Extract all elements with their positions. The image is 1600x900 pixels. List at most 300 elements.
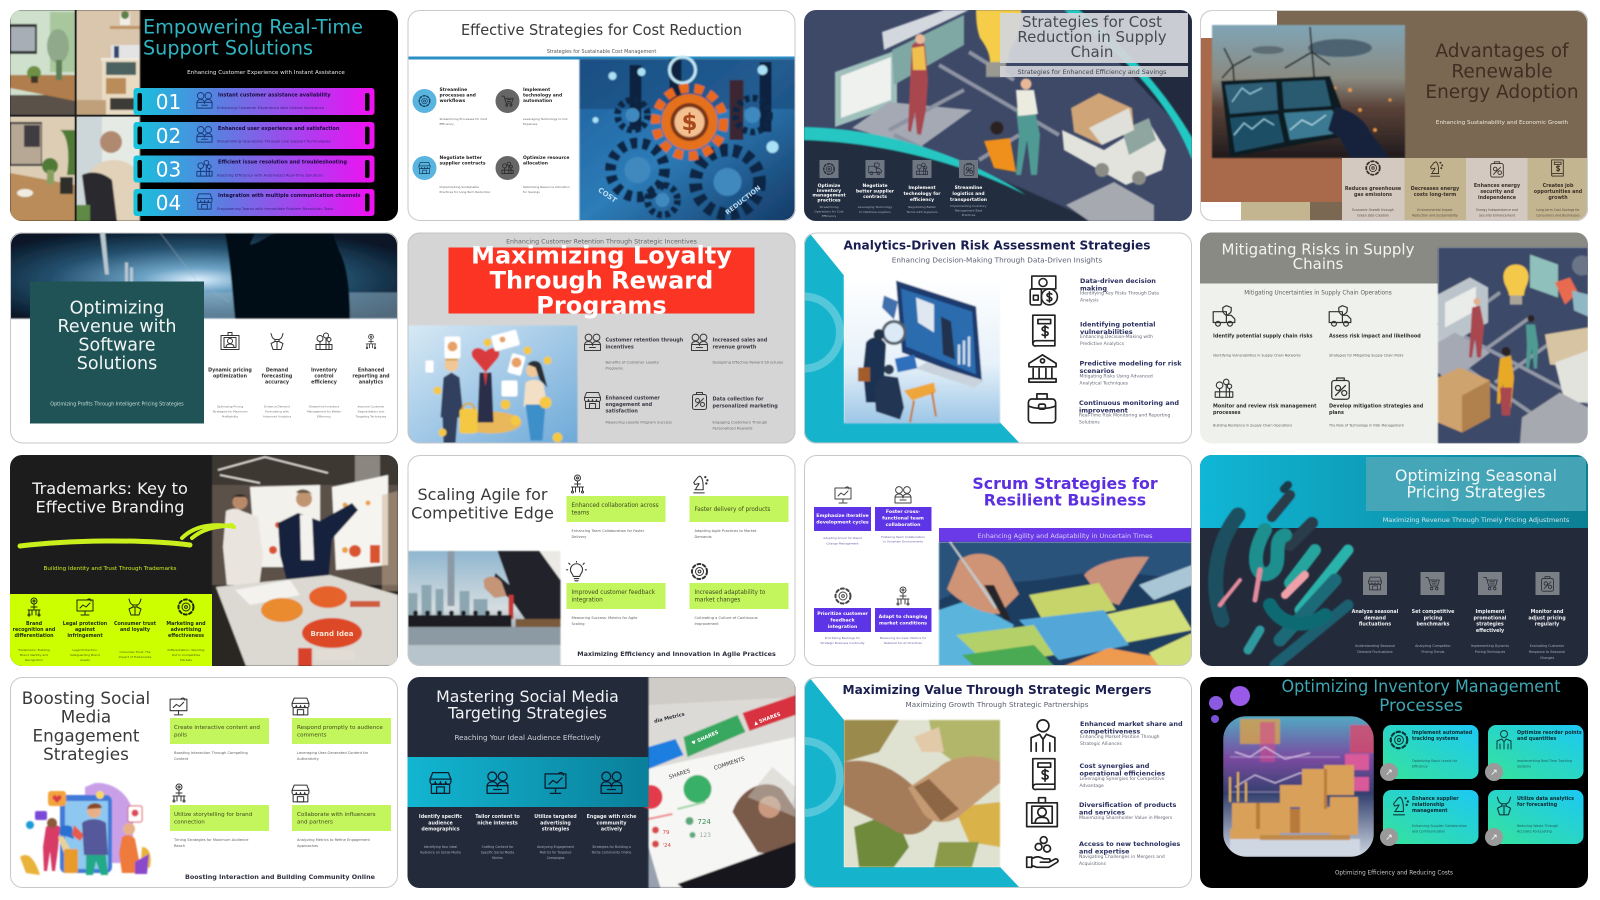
four green callouts: Scaling	[572, 622, 585, 626]
footer tagline: Maximizing Efficiency and Innovation in Agile Practices	[577, 650, 776, 658]
four targeting columns: advertising	[540, 820, 571, 826]
four gradient strategy cards: Enhancing Supplier Collaboration	[1412, 824, 1467, 828]
list of four strategies: Mitigating Risks Using Advanced	[1080, 374, 1153, 380]
four benefit columns: opportunities and	[1534, 189, 1583, 195]
teal icon band	[408, 757, 648, 807]
green feature band: effectiveness	[168, 633, 204, 639]
subtitle: Optimizing Profits Through Intelligent Pricing Strategies	[50, 402, 184, 408]
title: Mastering Social Media	[436, 687, 619, 706]
panel: Maximizing Loyalty Through Reward Programs	[408, 232, 796, 444]
four feature columns: optimization	[213, 374, 248, 380]
four pricing columns: Analyzing Competitor	[1415, 644, 1451, 648]
panel: Trademarks: Key to Effective Branding: Brand Idea	[310, 630, 354, 638]
four icon columns: Leveraging Technology	[858, 205, 892, 209]
four icon columns: Implement	[908, 186, 936, 191]
four targeting columns: strategies	[542, 827, 569, 833]
four green callouts: Content	[174, 757, 189, 761]
risk items: Building Resilience in Supply Chain Operations	[1213, 424, 1292, 428]
subtitle: Enhancing Customer Retention Through Strategic Incentives	[506, 238, 697, 246]
four gradient strategy cards: Enhance supplier	[1412, 797, 1459, 802]
panel: Optimizing Inventory Management Processes: Processes	[1379, 696, 1463, 716]
benefit items: Engaging Customers Through	[712, 420, 767, 424]
four green callouts: Leveraging User-Generated Content for	[297, 751, 368, 755]
four purple strategy boxes: Resilient Scrum Practices	[884, 641, 922, 645]
panel: Optimizing Revenue with Software Solutions: Optimizing	[70, 298, 164, 318]
list of four numbered bars: Enhanced user experience and satisfaction	[218, 126, 340, 132]
title box	[1000, 13, 1188, 63]
risk items: Strategies for Mitigating Supply Chain Risks	[1329, 354, 1404, 358]
list of four strategies: Identifying potential	[1080, 320, 1156, 328]
four targeting columns: Audience on Social Media	[420, 850, 461, 854]
list of four strategies: Predictive modeling for risk	[1080, 360, 1182, 368]
four pricing columns: Set competitive	[1412, 610, 1454, 615]
risk items: Identify potential supply chain risks	[1213, 334, 1313, 340]
four green callouts: Collaborate with influencers	[297, 812, 376, 818]
list of four strategies: Data-driven decision	[1080, 277, 1156, 285]
benefit items: Enhanced customer	[606, 396, 660, 402]
four pricing columns: pricing	[1424, 615, 1443, 621]
panel: Mastering Social Media Targeting Strategies: SHARES	[668, 768, 692, 781]
four icon columns: Efficiency	[822, 214, 836, 218]
four feature columns: Inventory	[311, 368, 337, 374]
panel: Mastering Social Media Targeting Strategies: '24	[662, 843, 672, 849]
four green callouts: Enhancing Team Collaboration for Faster	[572, 529, 644, 533]
four targeting columns: Crafting Content for	[482, 845, 513, 849]
list of four benefits: Acquisitions	[1079, 861, 1107, 867]
decorative purple circles	[1209, 686, 1250, 723]
four pricing columns: Implement	[1475, 610, 1505, 615]
four feature columns: reporting and	[352, 374, 390, 380]
four green callouts: Enhanced collaboration across	[572, 503, 659, 509]
title: Maximizing Value Through Strategic Mergers	[842, 683, 1152, 697]
four gradient strategy cards: and quantities	[1517, 736, 1556, 742]
four pricing columns: Implementing Dynamic	[1471, 644, 1509, 648]
panel: Strategies for Cost Reduction in Supply Chain: Strategies for Cost	[1022, 13, 1162, 31]
panel: Optimizing Seasonal Pricing Strategies	[1200, 455, 1588, 666]
four icon columns	[812, 160, 987, 218]
strategy items	[412, 87, 570, 194]
panel: Maximizing Loyalty Through Reward Programs: Maximizing Loyalty	[471, 242, 732, 270]
four gradient strategy cards: Efficiency	[1412, 764, 1428, 768]
four icon columns: Negotiate	[862, 184, 888, 189]
strategy items: processes and	[440, 92, 476, 98]
risk items: Assess risk impact and likelihood	[1329, 334, 1421, 340]
title: Scrum Strategies for	[972, 474, 1158, 493]
benefit items: Customer retention through	[606, 338, 683, 344]
panel: Effective Strategies for Cost Reduction: COST	[596, 186, 618, 205]
list of four benefits: Access to new technologies	[1079, 840, 1180, 848]
title: Boosting Social	[22, 688, 150, 708]
green feature band: differentiation	[14, 633, 54, 639]
four gradient strategy cards: management	[1412, 808, 1448, 814]
green feature band: Impact of Trademarks	[119, 655, 152, 659]
four purple strategy boxes: development cycles	[816, 520, 869, 526]
benefit items: incentives	[606, 344, 634, 350]
panel: Mastering Social Media Targeting Strategies: 123	[700, 832, 711, 839]
list of four numbered bars: Empowering Teams with Immediate Problem Resolution Tools	[217, 206, 333, 211]
four benefit columns: gas emissions	[1354, 192, 1392, 198]
four feature columns: Streamline Inventory	[309, 404, 339, 408]
subtitle: Maximizing Growth Through Strategic Partnerships	[906, 700, 1089, 709]
four targeting columns: community	[596, 820, 627, 826]
strategy items: Optimizing Resource Allocation	[523, 185, 570, 189]
list of four numbered bars: Efficient issue resolution and troubleshooting	[218, 160, 347, 166]
four targeting columns: Identifying Your Ideal	[424, 845, 457, 849]
four gradient strategy cards: Optimizing Stock Levels for	[1412, 759, 1457, 763]
four green callouts: Authenticity	[297, 757, 320, 761]
green feature band: Legal Protection:	[72, 648, 98, 652]
four targeting columns: Niches	[492, 856, 503, 860]
four icon columns: efficiency	[910, 197, 934, 203]
abstract slanted graphic	[1216, 485, 1348, 665]
four green callouts: Reach	[174, 844, 185, 848]
panel: Optimizing Seasonal Pricing Strategies: Optimizing Seasonal	[1395, 466, 1557, 485]
four benefit columns: independence	[1478, 195, 1517, 201]
four benefit columns: Security Enhancement	[1479, 214, 1516, 218]
panel: Empowering Real-Time Support Solutions: Support Solutions	[143, 36, 313, 60]
list of four benefits: Enhancing Market Position Through	[1080, 735, 1160, 740]
gears image	[580, 57, 796, 221]
list of four strategies: Analysis	[1080, 298, 1099, 304]
panel: Strategies for Cost Reduction in Supply Chain: Chain	[1071, 43, 1113, 61]
green feature band: Out in Competitive	[172, 653, 200, 657]
strategy items: technology and	[523, 92, 562, 98]
four benefit columns: Enhances energy	[1474, 184, 1520, 189]
four gradient strategy cards: Utilize data analytics	[1517, 797, 1574, 802]
list of four benefits: and services	[1079, 808, 1125, 816]
four targeting columns: audience	[428, 820, 453, 826]
list of four strategies: vulnerabilities	[1080, 328, 1133, 336]
four gradient strategy cards: Systems	[1517, 764, 1531, 768]
panel: Strategies for Cost Reduction in Supply Chain: Reduction in Supply	[1017, 28, 1167, 46]
four icon columns: Negotiating Better	[908, 205, 936, 209]
benefit items: revenue growth	[712, 344, 757, 350]
strategy items: Implementing Sustainable	[440, 185, 479, 189]
benefit items: personalized marketing	[712, 404, 778, 410]
panel: Trademarks: Key to Effective Branding	[10, 455, 398, 666]
subtitle: Enhancing Sustainability and Economic Growth	[1436, 120, 1569, 126]
panel: Maximizing Value Through Strategic Mergers	[768, 677, 1192, 888]
four feature columns: forecasting	[262, 374, 293, 380]
benefit items: Programs	[606, 366, 623, 370]
handshake over map image	[844, 720, 1000, 867]
four pricing columns: Understanding Seasonal	[1355, 644, 1395, 648]
four purple strategy boxes: Emphasize iterative	[816, 514, 869, 519]
title: Mitigating Risks in Supply	[1222, 240, 1414, 258]
title: Scaling Agile for	[418, 485, 547, 504]
four green callouts: Improved customer feedback	[572, 590, 655, 596]
purple subtitle band	[939, 528, 1192, 542]
four icon columns: practices	[817, 197, 841, 203]
four benefit columns: Environmental Impact	[1417, 208, 1453, 212]
green feature band: Trademarks: Building	[18, 648, 50, 652]
list of four strategies: Analytical Techniques	[1080, 380, 1129, 386]
four green callouts: Demands	[694, 535, 712, 539]
four targeting columns: Strategies for Building a	[592, 845, 631, 849]
four benefit columns: Long-term Cost Savings for	[1536, 208, 1580, 212]
panel: Mastering Social Media Targeting Strategies: COMMENTS	[713, 756, 746, 772]
four purple strategy boxes: collaboration	[886, 522, 920, 528]
green feature band: recognition and	[13, 627, 56, 633]
four pricing columns: Pricing Trends	[1422, 650, 1445, 654]
list of four strategies: scenarios	[1080, 367, 1115, 375]
list of four benefits: Navigating Challenges in Mergers and	[1079, 855, 1165, 860]
risk items: processes	[1213, 410, 1241, 416]
four purple strategy boxes: Prioritizing Backlogs for	[825, 636, 860, 640]
strategy items: Negotiate better	[440, 156, 482, 161]
green feature band: Legal protection	[63, 622, 107, 627]
strategy items: Implement	[523, 88, 550, 93]
four icon columns: Implementing Inventory	[950, 204, 987, 208]
list of four numbered bars	[134, 88, 374, 216]
list of four strategies	[1028, 276, 1182, 426]
four gradient strategy cards: Implement automated	[1412, 731, 1472, 736]
footer subtitle: Optimizing Efficiency and Reducing Costs	[1335, 870, 1453, 876]
subtitle: Reaching Your Ideal Audience Effectively	[454, 733, 601, 742]
list of four strategies: Real-Time Risk Monitoring and Reporting	[1079, 414, 1170, 418]
panel: Optimizing Inventory Management Processes	[1200, 677, 1588, 888]
four targeting columns: actively	[601, 827, 623, 833]
four purple strategy boxes: Change Management	[826, 542, 859, 546]
subtitle: Building Identity and Trust Through Trademarks	[44, 566, 177, 572]
four benefit columns: Consumers and Businesses	[1536, 214, 1580, 218]
subtitle: Enhancing Decision-Making Through Data-Driven Insights	[892, 256, 1102, 264]
four green callouts: Approaches	[297, 844, 318, 848]
four green callouts: Increased adaptability to	[694, 590, 765, 596]
four purple strategy boxes: Adapt to changing	[879, 615, 927, 620]
four icon columns: Management Best	[955, 208, 983, 212]
green feature band: and loyalty	[120, 627, 151, 633]
social media illustration	[20, 783, 151, 875]
four feature columns: Enhance Demand	[264, 404, 290, 408]
four icon columns: Operations for Cost	[814, 210, 844, 214]
green feature band: Markets	[180, 658, 192, 662]
four feature columns: Advanced Analytics	[263, 414, 292, 418]
title box	[1366, 457, 1586, 511]
strategy items: for Savings	[523, 190, 540, 194]
four icon columns: Optimize	[818, 184, 840, 189]
home office photo collage	[10, 10, 140, 221]
panel: Maximizing Loyalty Through Reward Programs: Programs	[536, 292, 667, 320]
panel: Effective Strategies for Cost Reduction: REDUCTION	[724, 184, 762, 217]
four green callouts	[170, 698, 391, 848]
four feature columns: accuracy	[265, 380, 290, 386]
four targeting columns: Identify specific	[419, 815, 462, 820]
title: Targeting Strategies	[447, 704, 607, 722]
four feature columns: efficiency	[311, 380, 338, 386]
panel: Mastering Social Media Targeting Strategies: dia Metrics	[654, 712, 685, 725]
benefit items: Measuring Loyalty Program Success	[606, 420, 672, 424]
four benefit columns: Reduction and Sustainability	[1412, 214, 1458, 218]
four purple strategy boxes: market conditions	[879, 620, 927, 626]
four pricing columns: demand	[1364, 615, 1386, 621]
four gradient strategy cards: Reducing Waste Through	[1517, 824, 1558, 828]
four gradient strategy cards: relationship	[1412, 802, 1445, 808]
green feature band: Assets	[80, 658, 90, 662]
four targeting columns: niche interests	[477, 820, 518, 826]
four purple strategy boxes: Adopting Scrum for Rapid	[823, 536, 862, 540]
list of four benefits: Cost synergies and	[1080, 762, 1149, 770]
title box	[30, 282, 204, 424]
list of four strategies: Continuous monitoring and	[1079, 399, 1179, 407]
risk items: plans	[1329, 410, 1344, 416]
green feature band: advertising	[171, 627, 202, 633]
list of four strategies: Enhancing Decision-Making with	[1080, 335, 1153, 340]
title: Effective Strategies for Cost Reduction	[461, 21, 742, 39]
four feature columns: Efficiency	[317, 414, 331, 418]
green feature band: Differentiation: Standing	[168, 648, 204, 652]
title: Strategies	[43, 744, 129, 764]
risk items: The Role of Technology in Risk Management	[1328, 424, 1404, 428]
title: Media	[61, 707, 111, 727]
four green callouts: Create interactive content and	[174, 725, 260, 731]
warehouse data photo	[1223, 716, 1374, 857]
four benefit columns: Green Jobs Creation	[1357, 214, 1389, 218]
list of four strategies: making	[1080, 284, 1107, 292]
list of four benefits	[1027, 720, 1183, 867]
benefit items: Benefits of Customer Loyalty	[606, 360, 659, 364]
strategy items: allocation	[523, 160, 548, 166]
four green callouts: Utilize storytelling for brand	[174, 812, 252, 818]
strategy items: Expenses	[523, 122, 538, 126]
four benefit columns: security and	[1480, 189, 1514, 195]
panel: Empowering Real-Time Support Solutions	[10, 10, 398, 221]
panel: Effective Strategies for Cost Reduction: $	[681, 110, 698, 136]
list of four benefits: Leveraging Synergies for Competitive	[1080, 777, 1165, 782]
panel: Optimizing Revenue with Software Solutions	[10, 232, 398, 444]
four purple strategy boxes: in Uncertain Environments	[883, 540, 923, 544]
risk items	[1213, 306, 1424, 428]
four gradient strategy cards: tracking systems	[1412, 736, 1458, 742]
panel: Mastering Social Media Targeting Strategies: ♥ SHARES	[691, 729, 720, 747]
four icon columns: Practices	[962, 213, 976, 217]
four gradient strategy cards: Accurate Forecasting	[1517, 830, 1552, 834]
subtitle box	[1000, 66, 1188, 77]
four feature columns: Profitability	[222, 414, 238, 418]
four pricing columns: fluctuations	[1359, 622, 1391, 628]
four green callouts: Respond promptly to audience	[297, 725, 383, 731]
four green callouts: polls	[174, 732, 187, 738]
four green callouts: Cultivating a Culture of Continuous	[694, 616, 758, 620]
strategy items: Streamline	[440, 88, 467, 93]
risk items: Monitor and review risk management	[1213, 404, 1316, 410]
list of four benefits: and expertise	[1079, 848, 1130, 856]
strategy items: Optimize resource	[523, 156, 569, 161]
four green callouts: Adapting Agile Practices to Market	[694, 529, 756, 533]
subtitle: Maximizing Revenue Through Timely Pricing Adjustments	[1383, 516, 1570, 524]
four green callouts	[566, 475, 788, 626]
list of four numbered bars: 04	[156, 191, 181, 215]
four pricing columns: Pricing Techniques	[1475, 650, 1506, 654]
title: Effective Branding	[35, 498, 185, 516]
four purple strategy boxes: Measuring Success: Metrics for	[880, 636, 926, 640]
panel: Mitigating Risks in Supply Chains	[1200, 232, 1592, 444]
green feature band: Marketing and	[166, 622, 206, 627]
four gradient strategy cards: ↗	[1385, 833, 1393, 843]
list of four numbered bars: Streamlining Operations Through Live Support Technologies	[217, 138, 331, 144]
title: Trademarks: Key to	[32, 479, 188, 498]
four icon columns: inventory	[817, 188, 841, 194]
four benefit columns: Creates job	[1543, 184, 1573, 189]
four benefit columns: growth	[1548, 195, 1568, 201]
four feature columns: analytics	[359, 380, 383, 386]
four pricing columns: regularly	[1535, 622, 1560, 628]
list of four numbered bars: Instant customer assistance availability	[218, 92, 331, 98]
panel: Optimizing Seasonal Pricing Strategies: Pricing Strategies	[1407, 482, 1545, 502]
four targeting columns: Engage with niche	[587, 815, 636, 820]
risk items: Identifying Vulnerabilities in Supply Chain Networks	[1213, 354, 1301, 358]
four pricing columns: Demand Fluctuations	[1357, 650, 1393, 654]
four feature columns: Strategies for Maximum	[213, 410, 248, 414]
four pricing columns: benchmarks	[1416, 622, 1450, 628]
list of four benefits: Enhanced market share and	[1080, 720, 1183, 728]
title: Chains	[1293, 255, 1344, 273]
four gradient strategy cards: ↗	[1385, 768, 1393, 778]
green feature band: Consumer trust	[114, 622, 156, 627]
teal corner shape	[804, 232, 1020, 444]
four pricing columns: Response to Seasonal	[1529, 650, 1565, 654]
benefit items: Data collection for	[712, 396, 764, 402]
four icon columns: logistics and	[952, 191, 985, 197]
strategy items: Leveraging Technology to Cut	[523, 117, 568, 121]
panel: Mastering Social Media Targeting Strategies: 724	[698, 818, 711, 826]
subtitle: Enhancing Customer Experience with Instant Assistance	[187, 70, 345, 76]
panel: Scrum Strategies for Resilient Business	[804, 455, 1192, 666]
four green callouts: market changes	[694, 598, 740, 604]
list of four strategies: improvement	[1079, 406, 1128, 414]
wind turbines and tablet photo	[1212, 25, 1405, 158]
four pricing columns: Changes	[1540, 656, 1554, 660]
branding meeting photo	[212, 455, 398, 666]
four purple strategy boxes: Prioritize customer	[817, 612, 868, 617]
green feature band: Brand	[26, 622, 42, 627]
four feature columns: Segmentation and	[358, 410, 384, 414]
benefit items	[584, 334, 783, 430]
footer tagline: Boosting Interaction and Building Community Online	[185, 873, 376, 881]
four gradient strategy cards: ↗	[1490, 768, 1498, 778]
list of four benefits: Strategic Alliances	[1080, 741, 1122, 747]
four targeting columns: Specific Social Media	[481, 850, 514, 854]
strategy items: Efficiency	[440, 122, 454, 126]
four green callouts: Timing Strategies for Maximum Audience	[174, 838, 248, 842]
four gradient strategy cards: for forecasting	[1517, 802, 1558, 808]
green feature band: Safeguarding Brand	[70, 653, 100, 657]
panel: Effective Strategies for Cost Reduction	[408, 10, 796, 221]
four green callouts: integration	[572, 598, 603, 604]
four green callouts: Measuring Success: Metrics for Agile	[572, 616, 637, 620]
four green callouts: Boosting Interaction Through Compelling	[174, 751, 248, 755]
list of four numbered bars: 01	[156, 90, 181, 114]
red title box	[448, 248, 754, 314]
title: Advantages of	[1435, 41, 1569, 62]
four gradient strategy cards: Implementing Real-Time Tracking	[1517, 759, 1572, 763]
four pricing columns: Monitor and	[1531, 610, 1563, 615]
four icon columns: management	[812, 193, 847, 199]
four feature columns: Targeting Techniques	[355, 414, 387, 418]
four green callouts: Delivery	[572, 535, 587, 539]
four icon columns: Terms with Suppliers	[905, 210, 938, 214]
four benefit columns	[1342, 158, 1588, 221]
four purple strategy boxes: Strategic Business Continuity	[820, 641, 865, 645]
green feature band: Recognition	[25, 658, 43, 662]
four green callouts: Faster delivery of products	[694, 507, 770, 513]
list of four strategies: Identifying Key Risks Through Data	[1080, 292, 1159, 296]
four green callouts: Improvement	[694, 622, 719, 626]
panel: Mastering Social Media Targeting Strategies	[408, 677, 796, 888]
four pricing columns: adjust pricing	[1528, 615, 1566, 621]
panel: Optimizing Revenue with Software Solutions: Software	[78, 336, 156, 356]
green feature band: infringement	[67, 633, 103, 639]
